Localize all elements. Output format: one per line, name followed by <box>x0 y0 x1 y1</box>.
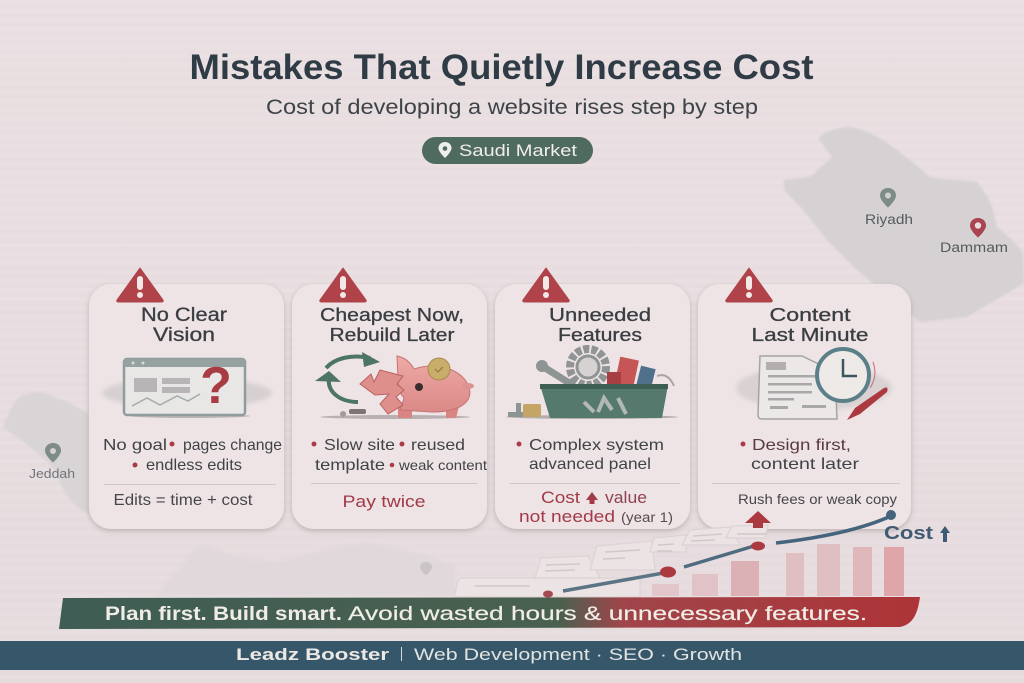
badge: Saudi Market <box>422 137 593 164</box>
card 2 bullets: weak content <box>398 457 487 473</box>
card 1 heading: Vision <box>153 325 215 346</box>
cost trend line <box>543 510 896 598</box>
card 4 bullets: Design first, <box>752 437 851 454</box>
card 1 bullets: pages change <box>183 437 282 454</box>
map pin: Dammam: Dammam <box>940 240 1008 255</box>
footer bar: Web Development · SEO · Growth <box>414 645 742 664</box>
card 4 heading: Content <box>770 304 850 325</box>
card 2 bullets: reused <box>411 437 465 454</box>
pig broken snout <box>360 370 404 414</box>
card 1 bullets: endless edits <box>146 457 242 474</box>
tagline banner: Plan first. Build smart. <box>105 603 342 625</box>
card 3 icon: toolbox with gear and wrench <box>506 349 678 419</box>
red up arrow <box>745 511 771 528</box>
map pin: Riyadh: Riyadh <box>865 212 913 227</box>
card 3 panel <box>495 284 690 529</box>
card 4 footer: Rush fees or weak copy <box>738 491 897 507</box>
map: Saudi Arabia main shape <box>784 127 1024 322</box>
tagline banner: Avoid wasted hours & unnecessary features. <box>348 603 867 625</box>
card 1 panel <box>89 284 284 529</box>
card 3 footer: not needed <box>519 508 615 526</box>
card 3: Unneeded Features <box>495 268 690 529</box>
card 2 heading: Rebuild Later <box>330 324 454 345</box>
card 2 warning icon <box>320 268 366 302</box>
card 3 heading: Features <box>558 324 642 345</box>
tagline banner <box>59 597 920 629</box>
map pin: Dammam <box>940 218 1008 255</box>
card 1 bullets: No goal <box>103 437 167 454</box>
card 1 icon: browser with question mark <box>102 357 272 418</box>
map pin: Jeddah <box>29 443 75 481</box>
card 4 warning icon <box>726 268 772 302</box>
card 2: Cheapest Now, Rebuild Later <box>292 268 487 529</box>
card 3 bullets: advanced panel <box>529 456 651 473</box>
card 4 heading: Last Minute <box>752 324 868 345</box>
card 1 warning icon <box>117 268 163 302</box>
card 2 panel <box>292 284 487 529</box>
card 2 bullets: template <box>315 457 385 474</box>
card 4 icon: document, clock and pen <box>736 349 892 420</box>
subtitle: Cost of developing a website rises step by step <box>266 96 758 119</box>
title: Mistakes That Quietly Increase Cost <box>190 48 814 87</box>
card 2 bullets <box>312 437 487 474</box>
card 3 footer: (year 1) <box>621 510 673 525</box>
card 3 bullets: Complex system <box>529 437 664 454</box>
footer bar: Leadz Booster <box>236 645 389 664</box>
card 2 icon: broken piggy bank with arrows <box>315 352 474 419</box>
card 2 footer: Pay twice <box>342 493 426 511</box>
map pin: Riyadh <box>865 188 913 227</box>
paper stack behind cost chart <box>454 525 768 597</box>
card 3 footer <box>510 483 680 526</box>
card 3 bullets <box>516 437 664 473</box>
card 4: Content Last Minute <box>698 268 911 529</box>
card 3 footer: value <box>605 489 647 507</box>
card 4 bullets: content later <box>751 456 860 473</box>
footer bar <box>0 641 1024 670</box>
card 3 warning icon <box>523 268 569 302</box>
label: Cost up <box>884 523 950 543</box>
faint map pin lower <box>420 562 432 576</box>
card 3 footer: Cost <box>541 489 580 507</box>
card 4 bullets <box>740 437 860 473</box>
map: Jeddah region shape <box>3 392 90 515</box>
card 1 footer: Edits = time + cost <box>114 492 253 509</box>
card 2 heading: Cheapest Now, <box>320 304 464 325</box>
label: Cost up: Cost <box>884 523 933 543</box>
badge: Saudi Market: Saudi Market <box>459 142 577 160</box>
map pin: Jeddah: Jeddah <box>29 466 75 481</box>
pig legs <box>398 403 460 418</box>
card 4 panel <box>698 284 911 529</box>
card 1 bullets <box>103 437 282 474</box>
card 1: No Clear Vision <box>89 268 284 529</box>
map: faint lower landmass <box>157 543 455 596</box>
card 2 bullets: Slow site <box>324 437 395 454</box>
card 1 icon: browser with question mark: ? <box>200 357 232 415</box>
pig body <box>397 356 470 412</box>
card 1 heading: No Clear <box>141 305 228 326</box>
card 3 heading: Unneeded <box>549 304 651 325</box>
cost bar chart <box>652 544 904 596</box>
